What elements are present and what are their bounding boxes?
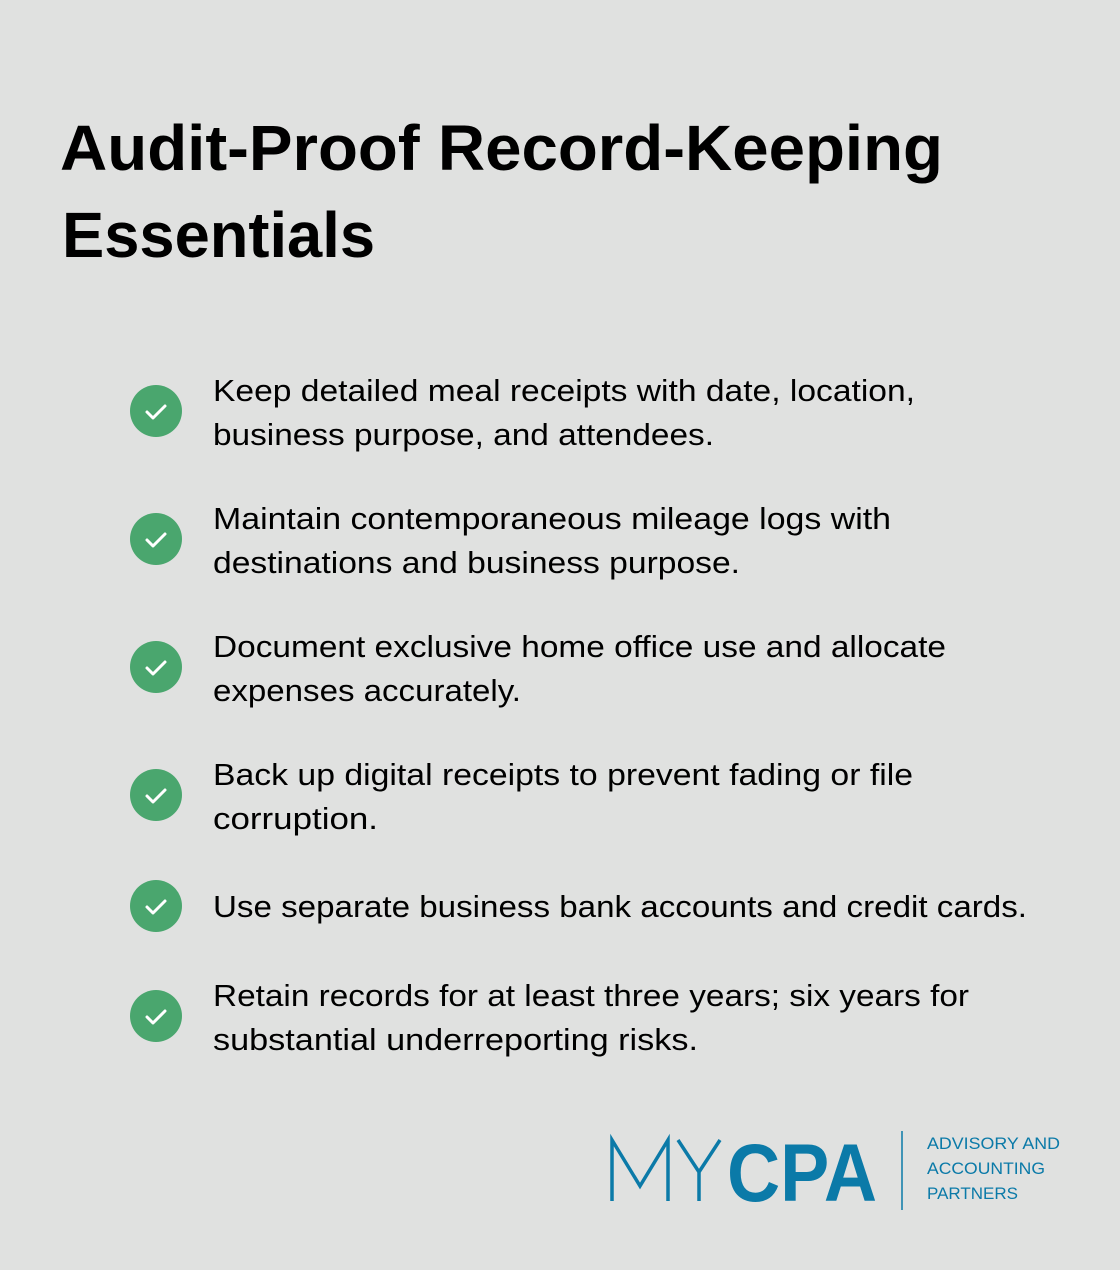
text: [213, 501, 891, 580]
text: [213, 373, 915, 452]
text: Back up digital receipts to prevent fading or file: [213, 757, 913, 792]
text: destinations and business purpose.: [213, 545, 740, 580]
text: [213, 757, 913, 836]
item 1: [130, 373, 915, 452]
icon: check: [130, 880, 182, 932]
text: Keep detailed meal receipts with date, location,: [213, 373, 915, 408]
icon: check: [130, 990, 182, 1042]
icon: check: [130, 513, 182, 565]
text: substantial underreporting risks.: [213, 1022, 698, 1057]
text: Use separate business bank accounts and credit cards.: [213, 889, 1027, 924]
item 4: [130, 757, 913, 836]
text: [213, 629, 946, 708]
text: [213, 978, 969, 1057]
title: [60, 112, 943, 271]
text: corruption.: [213, 801, 378, 836]
title: Essentials: [62, 199, 375, 271]
logo: ACCOUNTING: [927, 1160, 1045, 1178]
text: expenses accurately.: [213, 673, 521, 708]
text: Maintain contemporaneous mileage logs with: [213, 501, 891, 536]
logo wordmark: [612, 1140, 720, 1201]
item 2: [130, 501, 891, 580]
icon: check: [130, 769, 182, 821]
title: Audit-Proof Record-Keeping: [60, 112, 943, 184]
item 3: [130, 629, 946, 708]
text: Retain records for at least three years; six years for: [213, 978, 969, 1013]
text: business purpose, and attendees.: [213, 417, 714, 452]
logo: ADVISORY AND: [927, 1135, 1060, 1153]
icon: check: [130, 385, 182, 437]
logo: [610, 1128, 1060, 1212]
icon: check: [130, 641, 182, 693]
item 6: [130, 978, 969, 1057]
item 5: [130, 880, 1027, 932]
text: Document exclusive home office use and allocate: [213, 629, 946, 664]
logo: PARTNERS: [927, 1185, 1018, 1203]
